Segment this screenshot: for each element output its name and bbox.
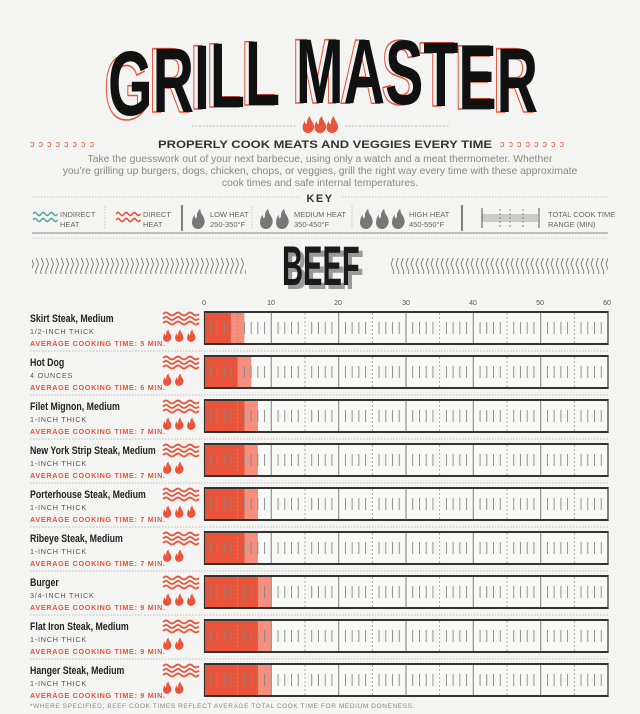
row: Flat Iron: [30, 619, 608, 659]
row: Hot Dog: Hot Dog: [30, 357, 64, 369]
row: Hot Dog: AVERAGE COOKING TIME: 6 MIN.: [30, 383, 166, 392]
intro paragraph: Take the guesswork out of your next barbecue, using only a watch and a meat thermometer. Whether: [88, 154, 553, 165]
key: 350-450°F: [294, 220, 330, 229]
row: Hanger Steak: AVERAGE COOKING TIME: 9 MIN.: [30, 691, 166, 700]
row: Burger: Burger: [30, 577, 59, 589]
row: Hanger Steak: 1-INCH THICK: [30, 679, 87, 688]
row: Hanger Steak: Hanger Steak, Medium: [30, 665, 124, 677]
key: 250-350°F: [210, 220, 246, 229]
row: Skirt Steak: Skirt Steak, Medium: [30, 313, 114, 325]
intro paragraph: you’re grilling up burgers, dogs, chicken, chops, or veggies, grill the right way every time with these approximate: [63, 166, 578, 177]
key: LOW HEAT: [210, 210, 249, 219]
axis labels: 50: [536, 300, 544, 307]
row: Ribeye: AVERAGE COOKING TIME: 7 MIN.: [30, 559, 166, 568]
footnote: *WHERE SPECIFIED, BEEF COOK TIMES REFLECT AVERAGE TOTAL COOK TIME FOR MEDIUM DONENESS.: [30, 703, 415, 710]
intro paragraph: [63, 154, 578, 189]
row: Hanger Steak: [30, 663, 608, 700]
row: Ribeye: Ribeye Steak, Medium: [30, 533, 123, 545]
row: Porterhouse: AVERAGE COOKING TIME: 7 MIN.: [30, 515, 166, 524]
row: Flat Iron: Flat Iron Steak, Medium: [30, 621, 129, 633]
intro paragraph: cook times and safe internal temperatures.: [222, 178, 418, 189]
key: KEY: [306, 193, 334, 205]
heading: BEEF: BEEF: [286, 240, 364, 302]
row: New York Strip: AVERAGE COOKING TIME: 7 MIN.: [30, 471, 166, 480]
row: Porterhouse: 1-INCH THICK: [30, 503, 87, 512]
axis labels: [202, 300, 611, 307]
row: Filet Mignon: AVERAGE COOKING TIME: 7 MIN.: [30, 427, 166, 436]
row: Ribeye: 1-INCH THICK: [30, 547, 87, 556]
axis labels: 60: [603, 300, 611, 307]
row: Hot Dog: 4 OUNCES: [30, 371, 73, 380]
key: INDIRECT: [60, 210, 96, 219]
key: DIRECT: [143, 210, 171, 219]
subtitle: PROPERLY COOK MEATS AND VEGGIES EVERY TIME: [158, 139, 492, 151]
key: HEAT: [143, 220, 163, 229]
row: Porterhouse: [30, 487, 608, 527]
key: [32, 193, 615, 238]
row: Burger: [30, 575, 608, 615]
row: Flat Iron: 1-INCH THICK: [30, 635, 87, 644]
title: GRILL MASTER: [108, 21, 538, 135]
row: Skirt Steak: AVERAGE COOKING TIME: 5 MIN.: [30, 339, 166, 348]
row: Burger: AVERAGE COOKING TIME: 9 MIN.: [30, 603, 166, 612]
heading: BEEF: BEEF: [282, 236, 360, 298]
row: Filet Mignon: [30, 399, 608, 439]
row: Skirt Steak: [30, 311, 608, 351]
row: New York Strip: [30, 443, 608, 483]
row: New York Strip: 1-INCH THICK: [30, 459, 87, 468]
axis labels: 10: [267, 300, 275, 307]
key: HIGH HEAT: [409, 210, 450, 219]
row: Flat Iron: AVERAGE COOKING TIME: 9 MIN.: [30, 647, 166, 656]
row: Burger: 3/4-INCH THICK: [30, 591, 95, 600]
title: GRILL MASTER: [104, 21, 534, 139]
key: MEDIUM HEAT: [294, 210, 346, 219]
row: Ribeye: [30, 531, 608, 571]
key: TOTAL COOK TIME: [548, 210, 615, 219]
key: 450-550°F: [409, 220, 445, 229]
row: Skirt Steak: 1/2-INCH THICK: [30, 327, 95, 336]
key: HEAT: [60, 220, 80, 229]
row: Hot Dog: [30, 355, 608, 395]
icon: three flames: [303, 116, 338, 133]
row: Porterhouse: Porterhouse Steak, Medium: [30, 489, 146, 501]
key: RANGE (MIN): [548, 220, 596, 229]
row: Filet Mignon: 1-INCH THICK: [30, 415, 87, 424]
axis labels: 40: [469, 300, 477, 307]
axis labels: 30: [402, 300, 410, 307]
row: New York Strip: New York Strip Steak, Medium: [30, 445, 156, 457]
subtitle: ↄↄↄↄↄↄↄↄ: [30, 139, 98, 149]
heading: BEEF: [32, 236, 608, 302]
axis labels: 20: [334, 300, 342, 307]
subtitle: [30, 139, 568, 151]
axis labels: 0: [202, 300, 206, 307]
subtitle: ↄↄↄↄↄↄↄↄ: [500, 139, 568, 149]
row: Filet Mignon: Filet Mignon, Medium: [30, 401, 120, 413]
